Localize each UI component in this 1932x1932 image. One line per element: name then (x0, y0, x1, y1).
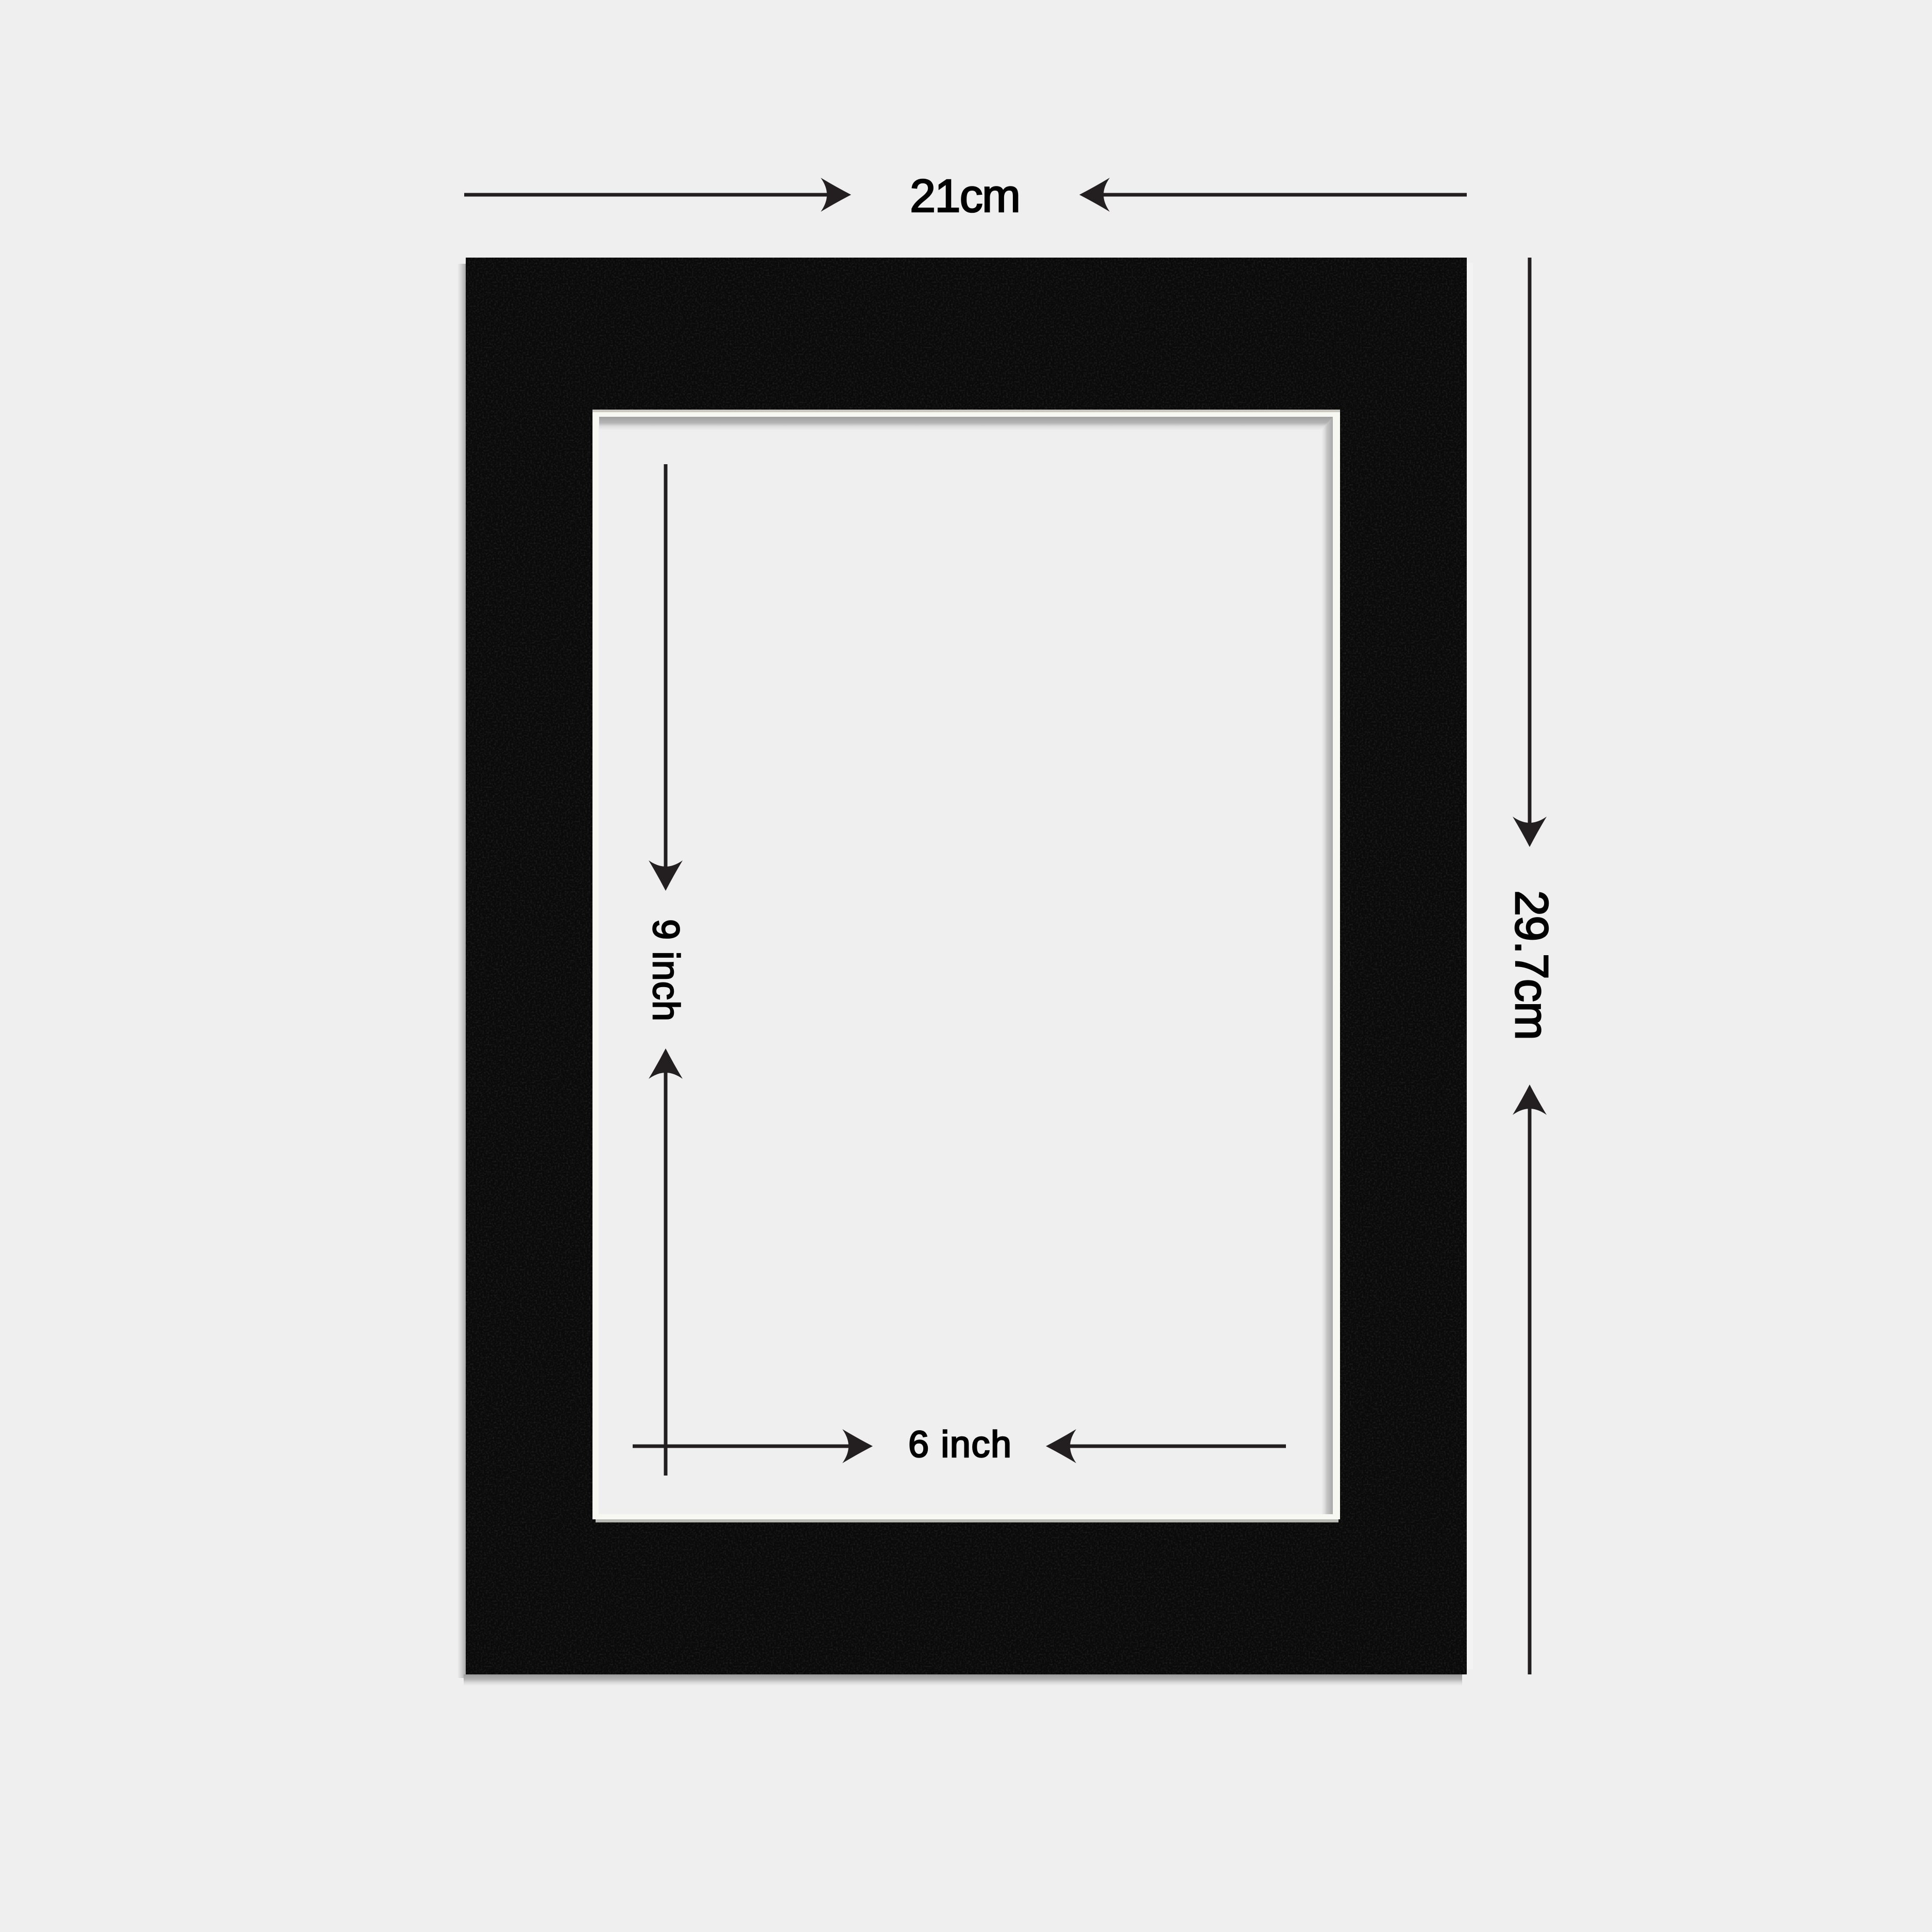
black mount board with window (457, 258, 1473, 1686)
arrow: inner width, right side (1046, 1429, 1286, 1463)
label: 6 inch: 6 inch (908, 1424, 1011, 1465)
arrow: right height, top side (1513, 258, 1547, 847)
arrow: top width, left side (464, 178, 851, 212)
mount board (466, 258, 1467, 1674)
label: 21cm: 21cm (910, 171, 1021, 222)
arrow: inner width, left side (633, 1429, 873, 1463)
label: 29.7cm: 29.7cm (1505, 890, 1557, 1040)
arrow: inner height, top side (649, 464, 683, 891)
window bevel (592, 410, 1340, 1522)
mount drop shadow (457, 263, 1473, 1686)
arrow: top width, right side (1079, 178, 1467, 212)
arrow: inner height, bottom side (649, 1048, 683, 1476)
label: 9 inch: 9 inch (645, 919, 686, 1021)
window opening (599, 417, 1333, 1514)
arrow: right height, bottom side (1513, 1084, 1547, 1674)
